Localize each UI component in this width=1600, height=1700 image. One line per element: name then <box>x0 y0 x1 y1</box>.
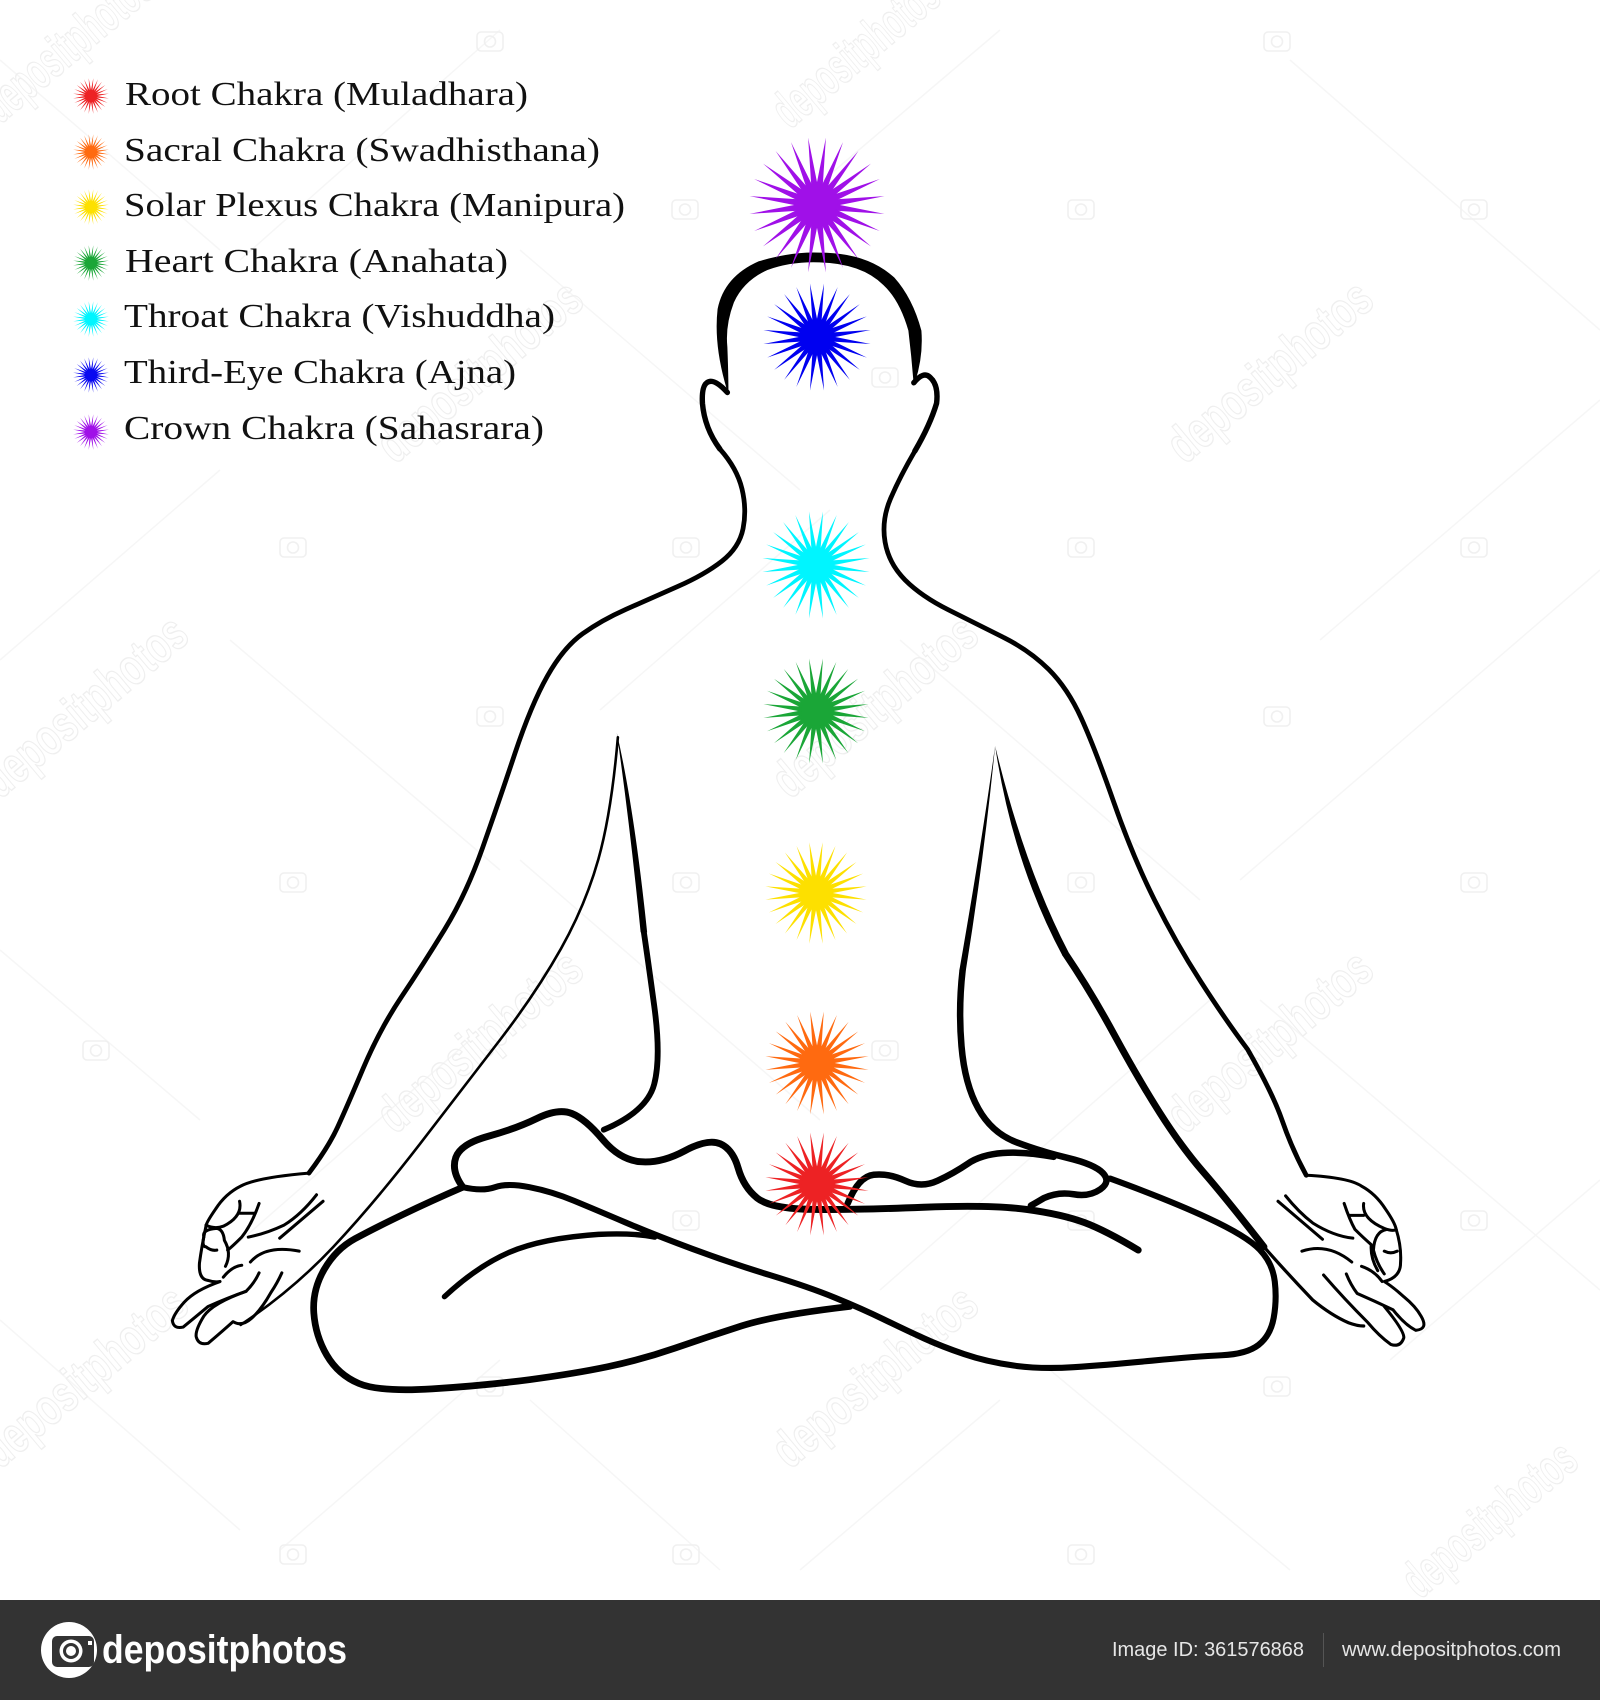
watermark pattern: depositphotos <box>365 939 594 1144</box>
chakra star: root <box>765 1132 869 1236</box>
legend item: crown chakra: Crown Chakra (Sahasrara) <box>124 410 544 447</box>
legend item: sacral chakra: Sacral Chakra (Swadhisthana) <box>124 132 600 169</box>
legend: chakra list <box>73 76 625 450</box>
chakra star: third eye <box>763 283 871 391</box>
footer bar <box>0 1600 1600 1700</box>
left shoulder and outer arm <box>309 449 745 1173</box>
left hand <box>172 1173 323 1344</box>
logo wordmark: depositphotos <box>102 1628 347 1672</box>
ears <box>702 375 937 451</box>
watermark pattern: depositphotos <box>760 604 989 809</box>
watermark pattern: depositphotos <box>1155 939 1384 1144</box>
right shoulder and outer arm <box>884 451 1306 1175</box>
crossing leg to right knee <box>463 1179 1276 1368</box>
right inner arm thick line <box>995 746 1264 1247</box>
seated meditating figure outline <box>172 253 1424 1390</box>
head outline <box>717 253 922 395</box>
watermark pattern: depositphotos <box>365 269 594 474</box>
left foot and waist line <box>454 1112 1138 1250</box>
left torso line <box>604 733 658 1130</box>
logo icon: camera in circle <box>41 1622 97 1678</box>
legend item: throat chakra: Throat Chakra (Vishuddha) <box>124 298 555 335</box>
image id: Image ID: 361576868 <box>1112 1639 1304 1661</box>
chakra star: heart <box>763 658 869 764</box>
legend item: solar plexus chakra: Solar Plexus Chakra (Manipura) <box>124 187 625 224</box>
right inner wrist <box>1264 1247 1364 1326</box>
watermark pattern: depositphotos <box>1155 269 1384 474</box>
chakra star: crown <box>749 137 885 273</box>
legend item: root chakra: Root Chakra (Muladhara) <box>125 76 528 113</box>
right torso line <box>959 746 1106 1206</box>
left calf line <box>444 1234 655 1297</box>
left leg <box>314 1187 850 1390</box>
left inner arm thin line <box>241 737 618 1325</box>
chakra star: solar plexus <box>765 842 867 944</box>
website url: www.depositphotos.com <box>1341 1639 1561 1661</box>
legend item: heart chakra: Heart Chakra (Anahata) <box>125 243 508 280</box>
chakra star: sacral <box>765 1011 869 1115</box>
right toe line <box>848 1153 1054 1203</box>
chakra star: throat <box>762 511 870 619</box>
watermark pattern: depositphotos <box>760 1274 989 1479</box>
legend item: third-eye chakra: Third-Eye Chakra (Ajna) <box>124 354 516 391</box>
right hand <box>1278 1175 1424 1345</box>
